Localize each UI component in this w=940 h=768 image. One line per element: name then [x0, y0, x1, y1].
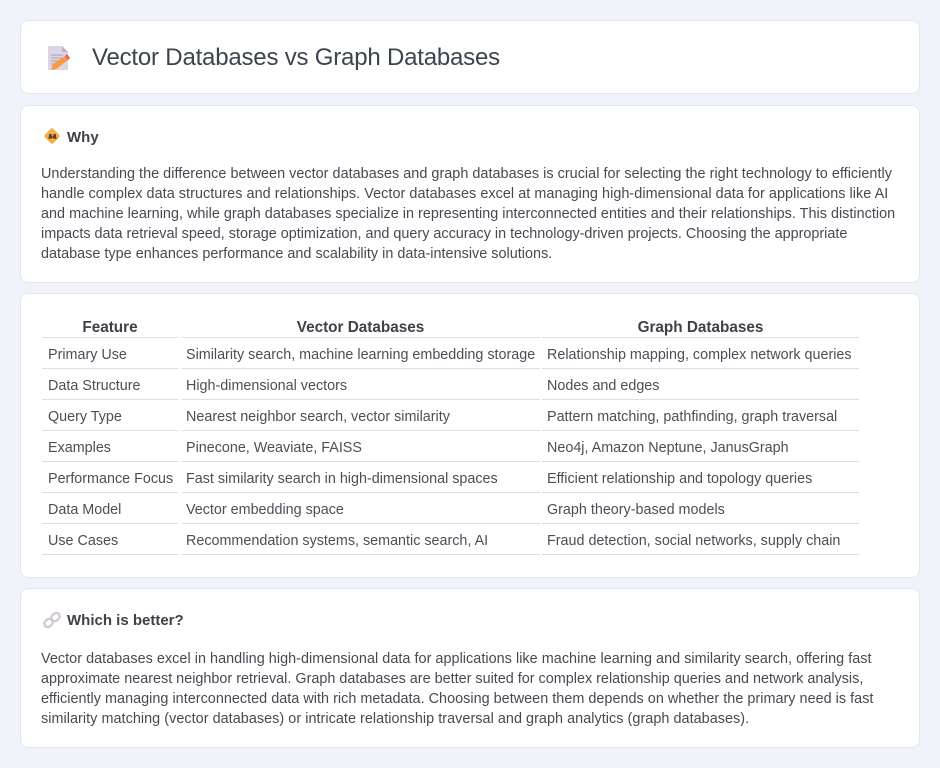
text block: why paragraph: impacts data retrieval speed, storage optimization, and query accuracy in technology-driven projects. Choosing the appropriate: [41, 226, 847, 242]
row: examples: Examples: [48, 440, 111, 456]
table: feature comparison: [42, 319, 859, 555]
text block: why paragraph: database type enhances performance and scalability in data-intensive solutions.: [41, 246, 552, 262]
row: use cases: Fraud detection, social networks, supply chain: [547, 533, 840, 549]
text block: verdict paragraph: efficiently managing interconnected data with rich metadata. Choosing between them depends on whether the primary need is fast: [41, 691, 873, 707]
row: query type: Nearest neighbor search, vector similarity: [186, 409, 450, 425]
text block: why paragraph: handle complex data structures and relationships. Vector databases excel at managing high-dimensional data for applications like AI: [41, 186, 888, 202]
row: performance focus: Efficient relationship and topology queries: [547, 471, 812, 487]
row: data structure: [48, 378, 659, 394]
row: primary use: Similarity search, machine learning embedding storage: [186, 347, 535, 363]
text block: verdict paragraph: [41, 651, 874, 727]
row: use cases: Use Cases: [48, 533, 118, 549]
panel: title card: [20, 20, 920, 94]
row: data structure: Data Structure: [48, 378, 140, 394]
table header: Graph Databases: [638, 319, 763, 336]
text block: why paragraph: Understanding the difference between vector databases and graph databases is crucial for selecting the right technology to efficiently: [41, 166, 892, 182]
panel: why: [20, 105, 920, 283]
row: performance focus: Performance Focus: [48, 471, 173, 487]
row: primary use: Relationship mapping, complex network queries: [547, 347, 852, 363]
panel: comparison table: [20, 293, 920, 578]
text block: why paragraph: [41, 166, 895, 262]
table header: [82, 319, 763, 336]
row: data model: Data Model: [48, 502, 121, 518]
icon: link: [43, 612, 61, 628]
heading: why: [44, 128, 99, 146]
row: examples: Neo4j, Amazon Neptune, JanusGraph: [547, 440, 789, 456]
row: query type: [48, 409, 837, 425]
table header: Feature: [82, 319, 138, 336]
title: Vector Databases vs Graph Databases: [92, 44, 500, 71]
table header: Vector Databases: [297, 319, 424, 336]
text block: why paragraph: and machine learning, while graph databases specialize in representing interconnected entities and their relationships. This distinction: [41, 206, 895, 222]
row: primary use: Primary Use: [48, 347, 127, 363]
row: data model: [48, 502, 725, 518]
row: data structure: High-dimensional vectors: [186, 378, 347, 394]
icon: warning diamond: [44, 128, 60, 144]
row: performance focus: Fast similarity search in high-dimensional spaces: [186, 471, 498, 487]
text block: verdict paragraph: Vector databases excel in handling high-dimensional data for applications like machine learning and similarity search, offering fast: [41, 651, 872, 667]
row: use cases: Recommendation systems, semantic search, AI: [186, 533, 488, 549]
row: examples: [48, 440, 789, 456]
row: use cases: [48, 533, 840, 549]
heading: which is better: [43, 612, 184, 629]
row: performance focus: [48, 471, 812, 487]
row: query type: Pattern matching, pathfinding, graph traversal: [547, 409, 837, 425]
row: query type: Query Type: [48, 409, 122, 425]
heading text: Which is better?: [67, 612, 184, 629]
row: data structure: Nodes and edges: [547, 378, 659, 394]
row: primary use: [48, 347, 852, 363]
heading text: Why: [67, 129, 99, 146]
row: examples: Pinecone, Weaviate, FAISS: [186, 440, 362, 456]
icon: memo with pencil: [48, 46, 70, 70]
panel: which is better: [20, 588, 920, 748]
row: data model: Vector embedding space: [186, 502, 344, 518]
row: data model: Graph theory-based models: [547, 502, 725, 518]
text block: verdict paragraph: similarity matching (vector databases) or intricate relationship traversal and graph analytics (graph databases).: [41, 711, 749, 727]
text block: verdict paragraph: approximate nearest neighbor retrieval. Graph databases are better suited for complex relationship queries and network analysis,: [41, 671, 863, 687]
